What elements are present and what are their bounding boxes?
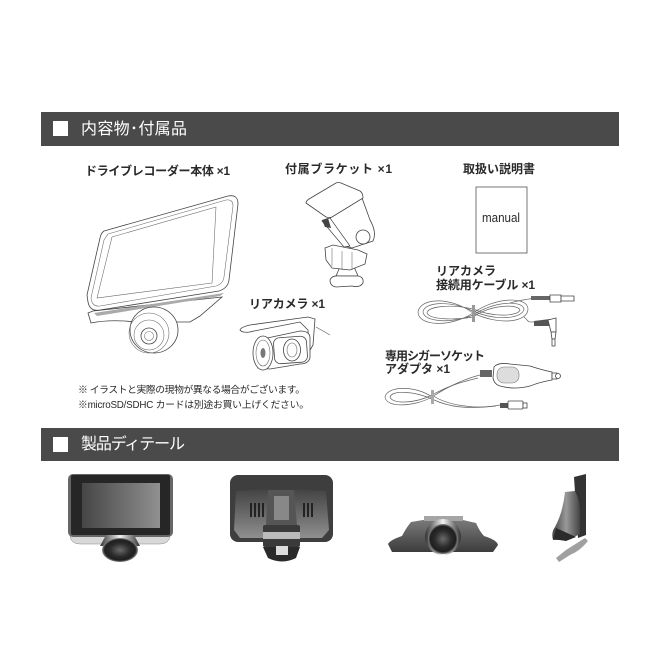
illustration: bracket — [306, 182, 374, 287]
label: rear camera cable: リアカメラ — [436, 264, 496, 278]
label: rear camera cable: 接続用ケーブル ×1 — [436, 277, 535, 292]
label: cigar socket adapter: アダプタ ×1 — [385, 361, 450, 376]
illustration: rear camera — [240, 317, 330, 370]
label: rear camera: リアカメラ ×1 — [249, 297, 325, 311]
header bar: contents and accessories — [41, 112, 619, 146]
label: bracket: 付属ブラケット ×1 — [285, 161, 392, 176]
header bar: product details: 製品ディテール — [81, 434, 185, 453]
label: manual: 取扱い説明書 — [463, 161, 535, 176]
label: dash cam unit: ドライブレコーダー本体 ×1 — [85, 163, 230, 178]
notes: ※ イラストと実際の現物が異なる場合がございます。 — [78, 383, 305, 396]
photo: rear view — [230, 475, 333, 562]
illustration: dash cam unit — [87, 196, 238, 353]
notes: ※microSD/SDHC カードは別途お買い上げください。 — [78, 399, 309, 411]
header bar: contents and accessories: 内容物･付属品 — [81, 120, 187, 138]
illustration: rear camera cable — [418, 295, 574, 346]
photo: front view — [68, 474, 173, 562]
icon: manual booklet — [476, 187, 527, 253]
photo: bracket front view — [388, 516, 498, 555]
illustration: cigar socket adapter — [385, 363, 560, 409]
icon: manual booklet: manual — [482, 211, 520, 225]
photo: side view — [552, 474, 588, 562]
label: cigar socket adapter: 専用シガーソケット — [385, 348, 485, 363]
header bar: product details — [41, 428, 619, 461]
